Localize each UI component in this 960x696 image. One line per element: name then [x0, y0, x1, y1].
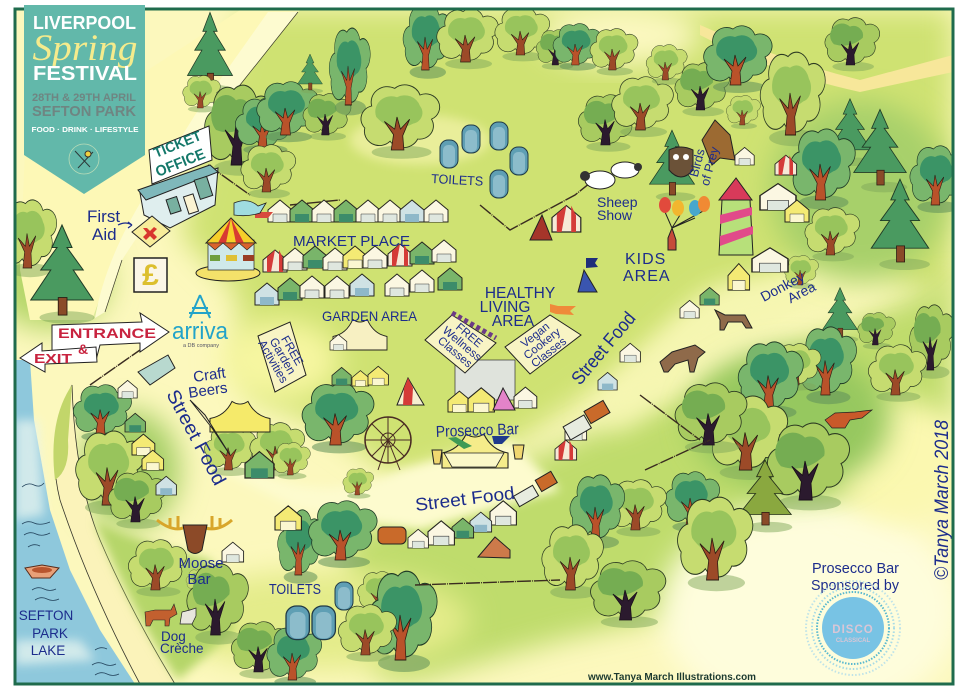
- donkey label: Area: [784, 278, 818, 306]
- dog creche label: Dog: [161, 629, 186, 644]
- title: spring: Spring: [32, 28, 138, 69]
- panel: market place stalls: [255, 200, 462, 305]
- owl: [669, 147, 693, 177]
- banner: free wellness classes: [425, 313, 496, 373]
- ticket office sign: TICKET: [151, 127, 204, 161]
- boat: [25, 565, 59, 578]
- road from ticket office: [95, 12, 298, 318]
- banner: free wellness classes: Wellness: [440, 325, 483, 364]
- healthy living label: AREA: [492, 313, 535, 330]
- lake: [15, 360, 135, 684]
- banner: free garden activities: Garden: [267, 335, 299, 377]
- ticket office sign: [149, 126, 212, 184]
- banner: free wellness classes: Classes: [435, 335, 474, 371]
- arrow: exit: [20, 341, 97, 372]
- prosecco bar label: Prosecco Bar: [436, 421, 520, 441]
- arrow: entrance: ENTRANCE: [58, 325, 156, 341]
- carousel: [196, 201, 266, 281]
- stalls along street food: [378, 343, 640, 558]
- arrow: exit: &: [78, 341, 88, 357]
- artist signature: ©Tanya March 2018: [932, 420, 953, 580]
- donkeys: [660, 310, 752, 372]
- icon: disco classical logo: DISCO: [832, 624, 874, 636]
- lower left green bank: [95, 520, 235, 680]
- sponsor label: Prosecco Bar: [812, 560, 899, 577]
- lake label: LAKE: [31, 643, 65, 658]
- banner: free garden activities: [255, 322, 310, 392]
- prosecco bar marquee: [432, 434, 524, 468]
- moose bar label: Bar: [187, 571, 211, 588]
- labels on signs and grounds: [19, 126, 818, 658]
- dog creche label: Crèche: [160, 641, 204, 656]
- balloons: [659, 196, 710, 250]
- toilets top: [440, 122, 528, 198]
- banner: vegan cookery classes: Classes: [529, 335, 569, 370]
- moose: [157, 516, 232, 554]
- craft beers label: Craft: [192, 364, 228, 386]
- moose bar label: Moose: [178, 555, 224, 572]
- sponsor label: Sponsored by: [811, 577, 899, 594]
- sheep show sign: Show: [597, 207, 633, 223]
- toilets bottom: [286, 582, 353, 640]
- title: liverpool: LIVERPOOL: [33, 12, 136, 33]
- birds of prey label: Birds: [687, 147, 708, 178]
- bird of prey: [702, 120, 735, 165]
- icon: pound sign: [134, 258, 167, 292]
- fences: [90, 165, 710, 585]
- lake waves: [22, 483, 119, 676]
- ferris wheel: [365, 417, 411, 470]
- pale wash behind top left: [20, 10, 300, 320]
- festival tagline: FOOD · DRINK · LIFESTYLE: [32, 125, 138, 134]
- dogs: [145, 604, 196, 626]
- banner: free garden activities: FREE: [278, 333, 306, 368]
- arrow: entrance: [52, 313, 169, 362]
- road edge lines: [105, 12, 298, 312]
- icon: festival emblem: [69, 144, 99, 174]
- logo: arriva: arriva: [172, 318, 229, 345]
- lake label: SEFTON: [19, 608, 73, 623]
- street food stalls left: [118, 355, 301, 562]
- street food label left: Street Food: [162, 386, 229, 489]
- healthy living label: LIVING: [480, 299, 530, 316]
- icon: pound sign: £: [142, 259, 159, 292]
- icon: first aid sign: [118, 216, 170, 247]
- shoreline path: [55, 385, 175, 684]
- credit line: www.Tanya March Illustrations.com: [587, 672, 756, 683]
- kids area tents: [578, 147, 809, 318]
- banner: festival title: [24, 5, 145, 194]
- ticket office sign: OFFICE: [153, 145, 208, 181]
- lower left trees: [73, 383, 437, 687]
- street food label centre: Street Food: [414, 483, 516, 515]
- title: festival: FESTIVAL: [33, 63, 137, 85]
- logo: arriva: a DB company: [183, 343, 219, 349]
- banner: vegan cookery classes: Cookery: [522, 326, 563, 362]
- street food label right: Street Food: [568, 308, 640, 389]
- market place label: MARKET PLACE: [293, 233, 410, 250]
- banner: vegan cookery classes: Vegan: [519, 321, 552, 350]
- festival venue: SEFTON PARK: [32, 103, 136, 120]
- garden area tents: [330, 319, 424, 405]
- arrow: exit: EXIT: [34, 351, 72, 366]
- lake label: PARK: [32, 626, 68, 641]
- helter skelter: [719, 178, 753, 255]
- garden area label: GARDEN AREA: [322, 308, 418, 324]
- top road right: [700, 25, 953, 92]
- birds of prey label: of Prey: [698, 145, 722, 187]
- icon: disco classical logo: CLASSICAL: [836, 638, 870, 644]
- fox: [825, 410, 872, 428]
- icon: disco classical logo: [806, 581, 900, 675]
- healthy living label: HEALTHY: [485, 285, 555, 302]
- festival dates: 28TH & 29TH APRIL: [32, 92, 136, 104]
- kids area label: KIDS: [625, 251, 666, 268]
- donkey label: Donkey: [758, 268, 807, 305]
- kids area label: AREA: [623, 268, 671, 285]
- toilets label bottom: TOILETS: [269, 581, 321, 598]
- craft beers label: Beers: [187, 380, 229, 402]
- banner: free wellness classes: FREE: [453, 321, 485, 350]
- grass strip beside shoreline: [53, 385, 72, 480]
- toilets label top: TOILETS: [431, 171, 484, 189]
- craft beer marquee: [190, 400, 270, 455]
- logo: arriva: [172, 295, 229, 349]
- first aid label: Aid: [92, 225, 117, 244]
- sheep show sign: Sheep: [597, 194, 638, 210]
- banner: free garden activities: Activities: [255, 337, 291, 386]
- banner: vegan cookery classes: [505, 304, 581, 374]
- red and striped tents near sheep show: [530, 206, 581, 240]
- lake highlights: [15, 420, 95, 665]
- ticket office building: [138, 165, 218, 228]
- first aid label: First: [87, 207, 120, 226]
- sheep: [580, 162, 642, 189]
- healthy living tents: [448, 360, 537, 412]
